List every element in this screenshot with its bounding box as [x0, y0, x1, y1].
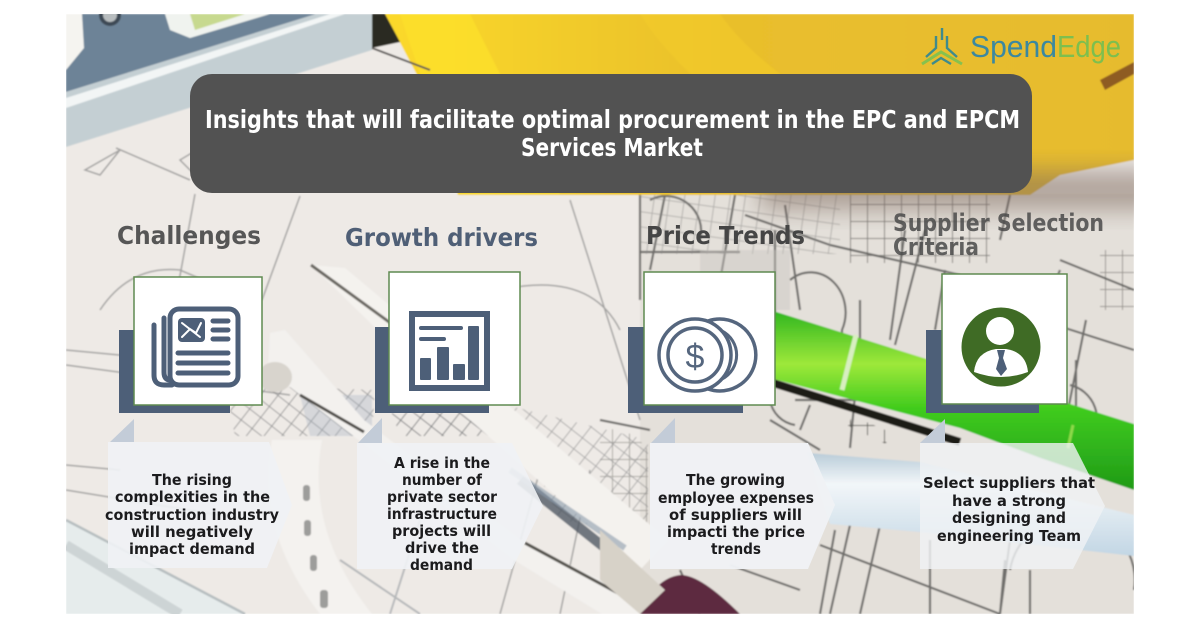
icon: coins: [659, 319, 756, 391]
title banner: Insights that will facilitate optimal procurement in the EPC and EPCM: [205, 105, 1020, 134]
logo: SpendEdge: Edge: [1057, 29, 1121, 64]
callout: growth drivers: number of: [402, 471, 482, 489]
callout: challenges: complexities in the: [115, 488, 270, 506]
callout: growth drivers: infrastructure: [387, 505, 497, 523]
callout: price trends: employee expenses: [658, 489, 814, 507]
callout: price trends: trends: [711, 540, 761, 558]
heading: Supplier Selection Criteria: Criteria: [893, 233, 979, 261]
calculator: [66, 14, 316, 92]
callout: supplier selection: Select suppliers that: [923, 474, 1095, 492]
panel: challenges card: [119, 277, 262, 413]
callout: supplier selection: [920, 419, 1105, 569]
callout: challenges: will negatively: [131, 523, 253, 541]
callout: supplier selection: engineering Team: [937, 527, 1081, 545]
panel: price trends card: [628, 272, 775, 413]
callout: price trends: of suppliers will: [669, 506, 802, 524]
left blueprint lines: [66, 145, 640, 614]
white pen: [808, 453, 1134, 556]
callout: challenges: construction industry: [105, 506, 279, 524]
icon: bar chart report: [409, 311, 490, 391]
callout: growth drivers: drive the: [405, 539, 479, 557]
bottom-left ruler: [66, 520, 245, 614]
drafting arm B: [290, 369, 572, 592]
callout: challenges: impact demand: [129, 540, 255, 558]
callout: growth drivers: private sector: [387, 488, 498, 506]
heading: Supplier Selection Criteria: Supplier Selection: [893, 209, 1104, 237]
curved protractor: [268, 440, 372, 614]
callout: supplier selection: have a strong: [952, 492, 1066, 510]
heading: Challenges: Challenges: [117, 221, 261, 250]
title banner: [190, 74, 1032, 193]
protractor grid: [225, 385, 375, 436]
callout: growth drivers: [357, 418, 543, 574]
logo: SpendEdge: Spend: [970, 29, 1057, 64]
callout: price trends: The growing: [686, 471, 785, 489]
callout: price trends: impacti the price: [667, 523, 805, 541]
icon: coins: $: [686, 338, 705, 376]
callout: growth drivers: projects will: [392, 522, 491, 540]
green pen: [770, 382, 960, 442]
drafting arm A: [330, 276, 650, 568]
callout: challenges: The rising: [152, 471, 232, 489]
heading: Growth drivers: Growth drivers: [345, 223, 538, 252]
icon: person with tie: [962, 308, 1040, 386]
title banner: Services Market: [521, 133, 703, 162]
heading: Supplier Selection Criteria: [893, 209, 1104, 261]
callout: growth drivers: demand: [410, 556, 473, 574]
icon: newspaper: [154, 309, 238, 385]
panel: supplier selection card: [926, 274, 1067, 413]
maroon object: [640, 575, 740, 614]
heading: Price Trends: Price Trends: [646, 221, 805, 250]
hard hat: [385, 14, 1134, 195]
logo: SpendEdge: [922, 28, 1121, 64]
panel: growth drivers card: [375, 272, 520, 413]
callout: supplier selection: designing and: [952, 509, 1066, 527]
soft top shade right: [760, 170, 1160, 210]
callout: growth drivers: A rise in the: [394, 454, 490, 472]
callout: challenges: [105, 419, 292, 568]
callout: price trends: [650, 418, 835, 569]
blueprint floor plan: [600, 195, 1135, 614]
